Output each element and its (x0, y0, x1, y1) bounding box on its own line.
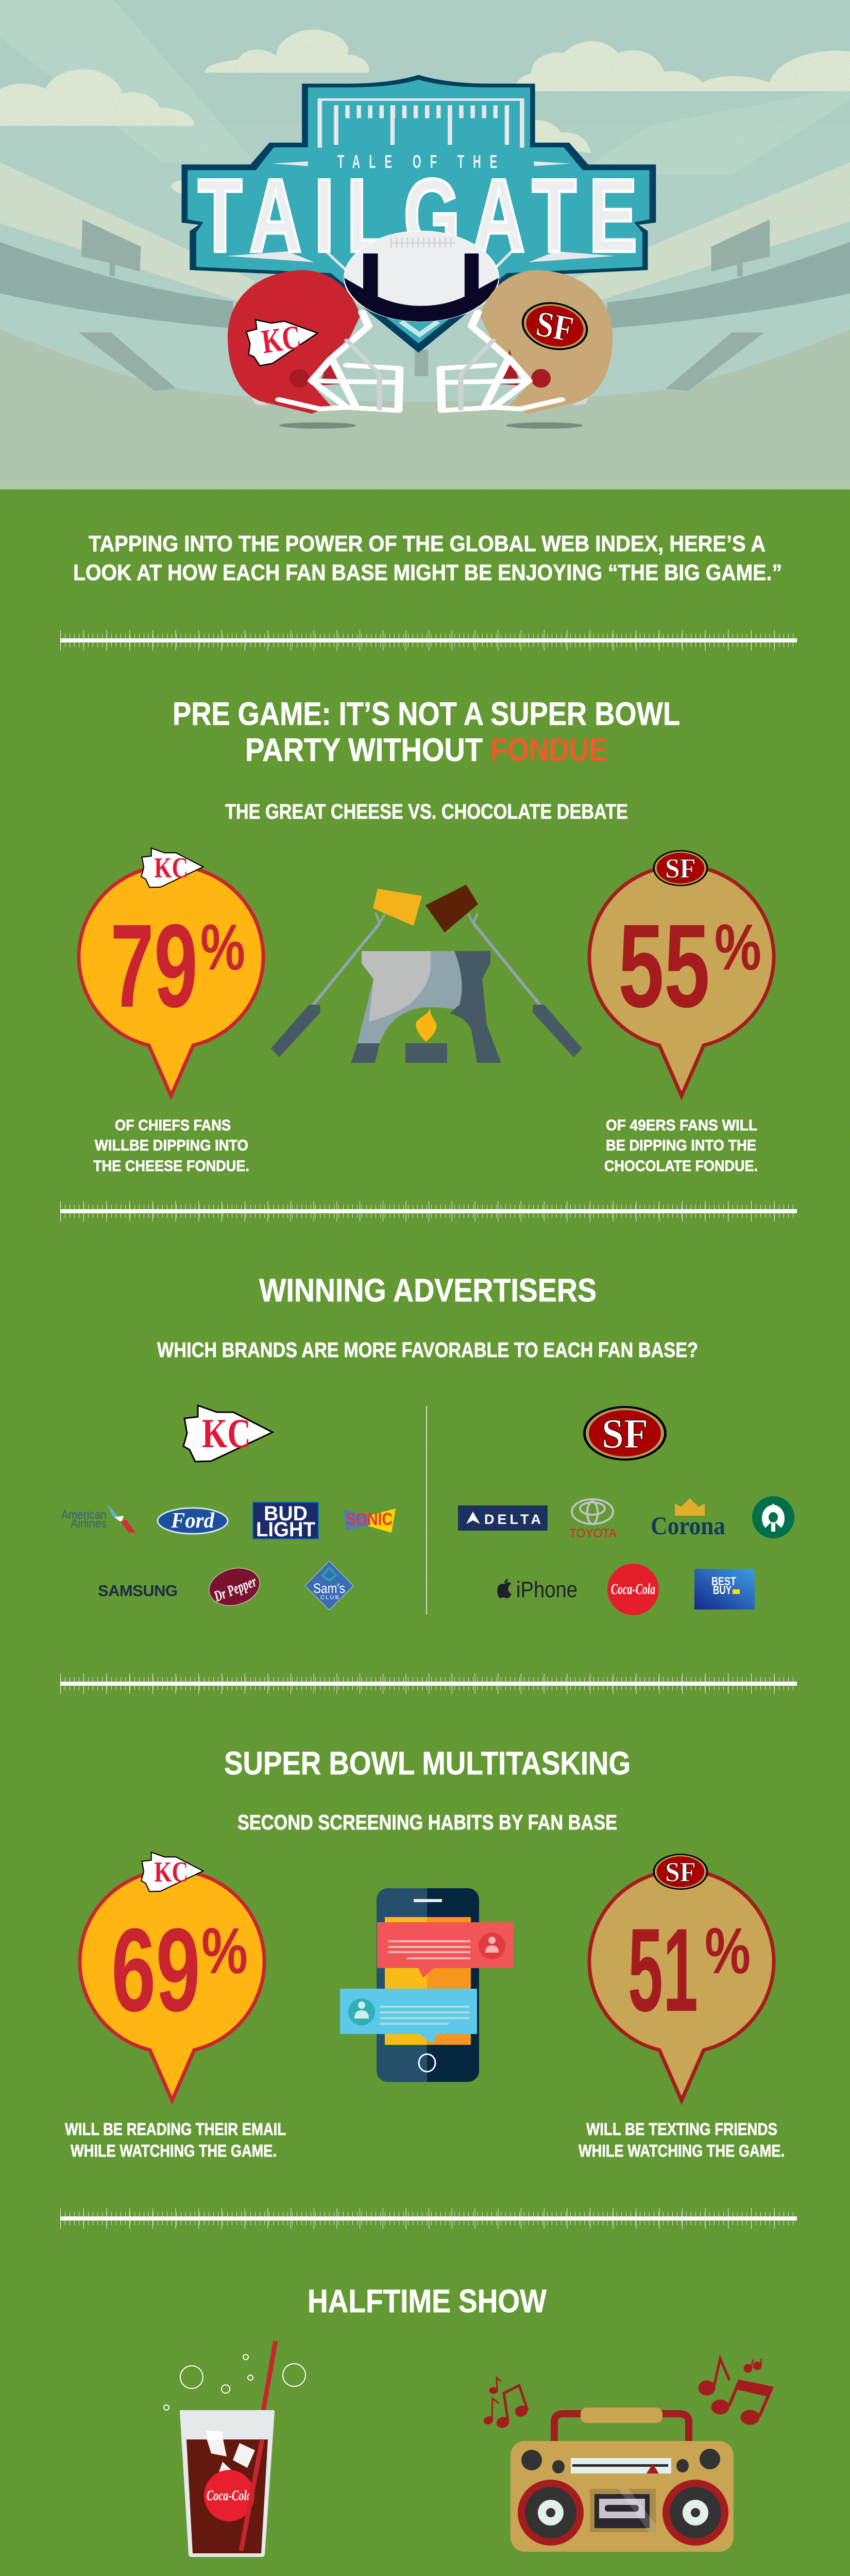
brand: corona (651, 1498, 725, 1540)
heading: HALFTIME SHOW (308, 2283, 547, 2319)
icon: boombox (511, 2408, 734, 2552)
intro text: LOOK AT HOW EACH FAN BASE MIGHT BE ENJOYING “THE BIG GAME.” (73, 560, 782, 585)
brand: american airlines: Airlines (71, 1517, 107, 1531)
brand: best buy: BUY (713, 1583, 732, 1597)
brand: sam's club: Sam's (313, 1581, 345, 1596)
49ers logo (653, 850, 708, 886)
heading: FONDUE (490, 732, 607, 768)
chiefs logo (183, 1405, 273, 1462)
icon: fondue pot (271, 885, 582, 1063)
chiefs logo: KC (154, 852, 188, 884)
stat balloon: 49ers 51% (589, 1870, 774, 2100)
chiefs logo on helmet (244, 311, 321, 367)
title: tailgate: TAILGATE (198, 157, 637, 274)
49ers logo: SF (665, 853, 696, 884)
caption: 49ers: BE DIPPING INTO THE (606, 1137, 756, 1154)
stat balloon: chiefs 69%: % (201, 1914, 248, 1987)
stat balloon: 49ers 55%: % (715, 911, 761, 984)
brand: samsung: SAMSUNG (98, 1582, 178, 1600)
caption: chiefs: THE CHEESE FONDUE. (93, 1158, 249, 1175)
icon: coca-cola glass: Coca-Cola (207, 2487, 252, 2504)
icon: music notes right (699, 2359, 772, 2425)
brand: bud light: BUD (264, 1502, 308, 1525)
49ers logo on helmet (518, 297, 591, 355)
caption: chiefs: WHILE WATCHING THE GAME. (71, 2141, 277, 2160)
helmet: 49ers (440, 270, 613, 414)
brand: bud light (253, 1502, 318, 1541)
brand: iphone (497, 1577, 577, 1602)
brand: dr pepper (205, 1563, 264, 1611)
caption: 49ers: OF 49ERS FANS WILL (606, 1117, 757, 1134)
stat balloon: 49ers 51%: 51 (628, 1904, 698, 2036)
panel: super bowl multitasking (65, 1745, 785, 2160)
caption: 49ers: WHILE WATCHING THE GAME. (579, 2141, 785, 2160)
brand: coca-cola (607, 1564, 659, 1615)
caption: chiefs: WILL BE READING THEIR EMAIL (65, 2120, 286, 2139)
brand: sonic: SONIC (346, 1510, 393, 1529)
title: tale of the: TALE OF THE (337, 151, 497, 172)
brand: toyota: TOYOTA (569, 1527, 617, 1540)
heading (173, 696, 680, 768)
panel: pre game fondue (79, 696, 774, 1175)
stat balloon: chiefs 79% (79, 866, 263, 1096)
stat balloon: chiefs 79%: % (200, 911, 245, 984)
heading: SUPER BOWL MULTITASKING (224, 1745, 631, 1782)
caption: 49ers: WILL BE TEXTING FRIENDS (586, 2120, 777, 2139)
panel: halftime show (129, 2283, 772, 2576)
brand: delta (458, 1505, 548, 1531)
chiefs logo (141, 848, 203, 887)
brand: american airlines: American (61, 1508, 107, 1522)
brand: ford: Ford (171, 1509, 215, 1533)
49ers logo: SF (665, 1856, 696, 1887)
chiefs logo: KC (202, 1411, 251, 1456)
caption: 49ers (604, 1117, 758, 1175)
stat balloon: chiefs 79%: 79 (110, 900, 198, 1032)
stat balloon: chiefs 69%: 69 (111, 1904, 200, 2036)
chiefs logo: KC (154, 1856, 188, 1888)
brand: best buy (694, 1569, 755, 1609)
icon: smartphone with chat bubbles (340, 1888, 514, 2082)
stat balloon: chiefs 69% (80, 1870, 264, 2100)
brand: corona: Corona (651, 1511, 725, 1540)
caption: chiefs: OF CHIEFS FANS (115, 1117, 231, 1134)
stat balloon: 49ers 55% (589, 866, 774, 1096)
caption: 49ers (579, 2120, 785, 2160)
brand: delta: DELTA (484, 1512, 541, 1527)
brand: best buy: BEST (711, 1574, 736, 1588)
heading: WINNING ADVERTISERS (259, 1273, 597, 1309)
brand: american airlines (61, 1504, 135, 1533)
brand: iphone: iPhone (516, 1577, 577, 1602)
brand: coca-cola: Coca-Cola (611, 1581, 655, 1598)
chiefs logo (141, 1852, 203, 1892)
brand: toyota (569, 1499, 617, 1540)
subheading: SECOND SCREENING HABITS BY FAN BASE (237, 1810, 617, 1834)
caption: chiefs (65, 2120, 286, 2160)
intro text: TAPPING INTO THE POWER OF THE GLOBAL WEB INDEX, HERE’S A (89, 531, 766, 556)
brand: sonic (343, 1509, 396, 1533)
helmet: chiefs (228, 270, 400, 414)
caption: chiefs (93, 1117, 249, 1175)
brand: bud light: LIGHT (256, 1518, 315, 1541)
brand: sam's club: CLUB (320, 1595, 339, 1601)
stadium background (0, 0, 850, 489)
subheading: WHICH BRANDS ARE MORE FAVORABLE TO EACH FAN BASE? (157, 1338, 698, 1362)
shield badge (182, 75, 656, 353)
heading: PRE GAME: IT’S NOT A SUPER BOWL (173, 696, 680, 732)
caption: chiefs: WILLBE DIPPING INTO (95, 1137, 248, 1154)
subheading: THE GREAT CHEESE VS. CHOCOLATE DEBATE (225, 800, 628, 823)
brand: ford (158, 1508, 228, 1534)
49ers logo (653, 1854, 708, 1890)
brand: starbucks (752, 1496, 794, 1538)
panel: winning advertisers (61, 1273, 794, 1615)
football (344, 231, 499, 321)
stat balloon: 49ers 55%: 55 (618, 900, 710, 1032)
stat balloon: 49ers 51%: % (705, 1914, 751, 1987)
49ers logo on helmet: SF (533, 303, 576, 350)
caption: 49ers: CHOCOLATE FONDUE. (604, 1158, 758, 1175)
intro text (73, 531, 782, 585)
heading: PARTY WITHOUT (245, 732, 483, 768)
chiefs logo on helmet: KC (260, 318, 303, 361)
hero: stadium illustration with logo (0, 0, 850, 489)
brand: dr pepper: Dr Pepper (211, 1573, 259, 1605)
brand: sam's club (305, 1561, 353, 1610)
icon: coca-cola glass (164, 2341, 305, 2557)
49ers logo (583, 1406, 667, 1461)
49ers logo: SF (602, 1410, 648, 1457)
icon: music notes left (483, 2378, 529, 2430)
